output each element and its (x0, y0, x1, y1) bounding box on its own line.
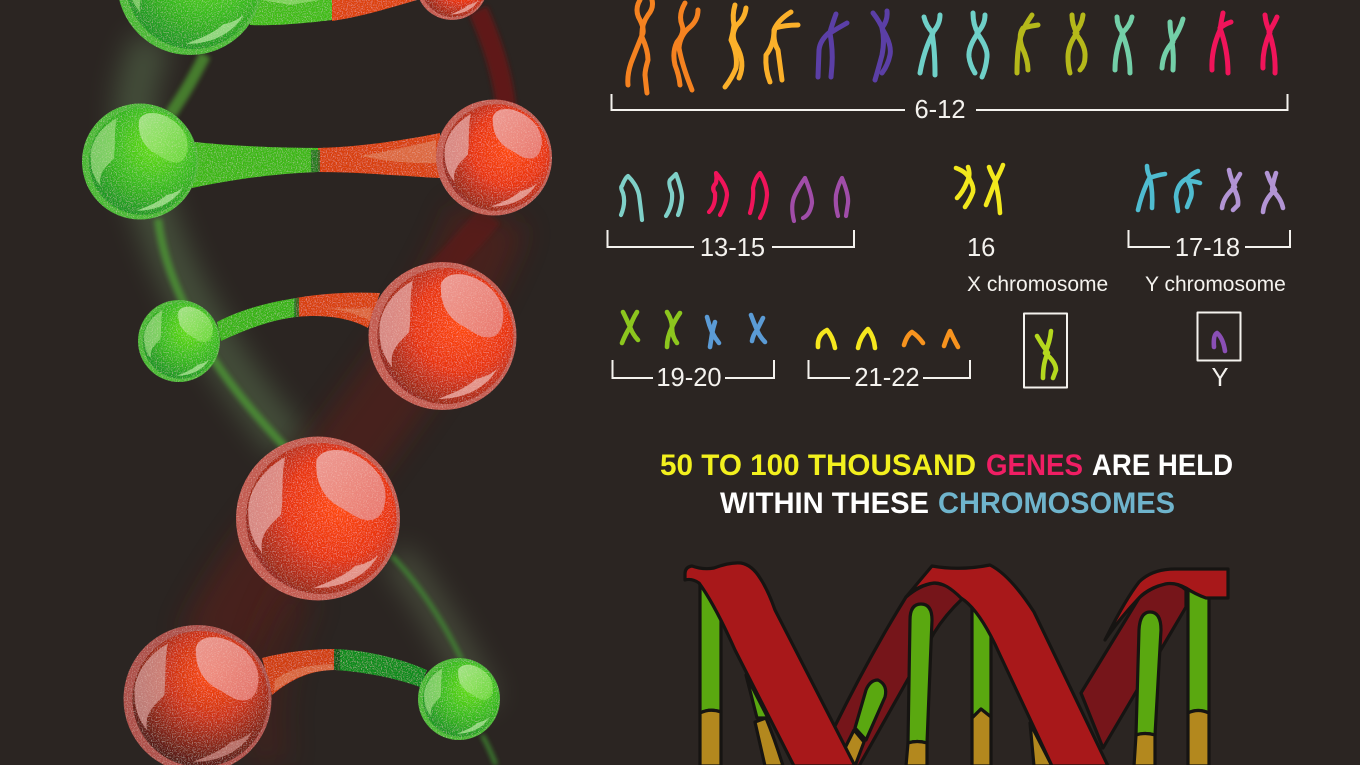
sphere: central red (236, 436, 400, 600)
chromosome pair 9 teal (920, 13, 987, 77)
green strand glow (135, 40, 496, 765)
chromosome row 13-18 (621, 165, 1283, 221)
heading: WITHIN THESE (720, 487, 929, 520)
sphere: red bottom row (124, 625, 272, 765)
sphere: red third row (368, 262, 516, 410)
green base bars (700, 585, 1209, 743)
heading: CHROMOSOMES (938, 487, 1175, 520)
front ribbon strands (685, 563, 1228, 765)
label 16: 16 (967, 234, 995, 262)
chromosome pair 11 mint (1115, 17, 1183, 73)
bracket and label 21-22: 21-22 (854, 364, 920, 392)
X chromosome in frame (1024, 314, 1067, 388)
bracket and label 6-12: 6-12 (914, 96, 966, 124)
chromosome pair 7 amber (725, 5, 798, 87)
chromosomes 13 teal (621, 174, 682, 220)
label Y: Y (1211, 364, 1229, 392)
chromosomes 19 green (622, 312, 680, 347)
large DNA helix illustration (82, 0, 552, 765)
sphere: top red (416, 0, 488, 20)
bracket and label 6-12 (612, 94, 1288, 124)
chromosomes 18 lilac (1222, 170, 1283, 212)
chromosome row 6-12 (628, 0, 1277, 93)
bracket and label 17-18 (1128, 230, 1290, 262)
bracket and label 13-15 (608, 230, 854, 262)
sphere: top green (117, 0, 263, 55)
chromosomes 14 crimson (709, 173, 767, 218)
chromosome pair 6 orange (628, 0, 698, 93)
label Y chromosome: Y chromosome (1145, 273, 1286, 296)
red strand glow (215, 10, 507, 765)
bracket and label 17-18: 17-18 (1175, 234, 1240, 262)
chromosome pair 8 purple (818, 11, 890, 80)
chromosomes 20 blue (707, 315, 765, 347)
chromosome pair 12 crimson (1212, 13, 1277, 73)
sphere: green third row (138, 300, 220, 382)
sphere: green second row (82, 104, 198, 220)
heading: 50 TO 100 THOUSAND (660, 449, 976, 482)
gold base bars (700, 709, 1209, 765)
chromosomes 17 blue (1138, 166, 1200, 211)
rod: second pair (192, 133, 440, 188)
sphere: green bottom row (418, 658, 500, 740)
chromosomes 15 purple (792, 178, 848, 221)
chromosome row 19-22 and sex chromosomes (622, 312, 1240, 388)
spheres and connecting rods (82, 0, 552, 765)
bracket and label 19-20 (612, 360, 774, 392)
chromosomes 22 orange (904, 331, 958, 347)
heading: GENES (986, 449, 1083, 482)
bracket and label 19-20: 19-20 (656, 364, 722, 392)
heading (660, 449, 1233, 520)
chromosomes 21 yellow (818, 329, 875, 348)
chromosome pair 10 olive (1017, 15, 1085, 73)
sphere: red second row (436, 100, 552, 216)
heading: ARE HELD (1092, 449, 1233, 482)
Y chromosome in frame (1198, 312, 1240, 360)
rod: top pair (250, 0, 417, 25)
rod: fifth pair (262, 649, 427, 695)
small DNA ribbon illustration (685, 563, 1228, 765)
back ribbon strands (830, 583, 1186, 765)
bracket and label 13-15: 13-15 (700, 234, 765, 262)
chromosomes 16 yellow (956, 165, 1003, 213)
label X chromosome: X chromosome (967, 273, 1108, 296)
bracket and label 21-22 (808, 360, 970, 392)
rod: third pair (217, 293, 380, 341)
